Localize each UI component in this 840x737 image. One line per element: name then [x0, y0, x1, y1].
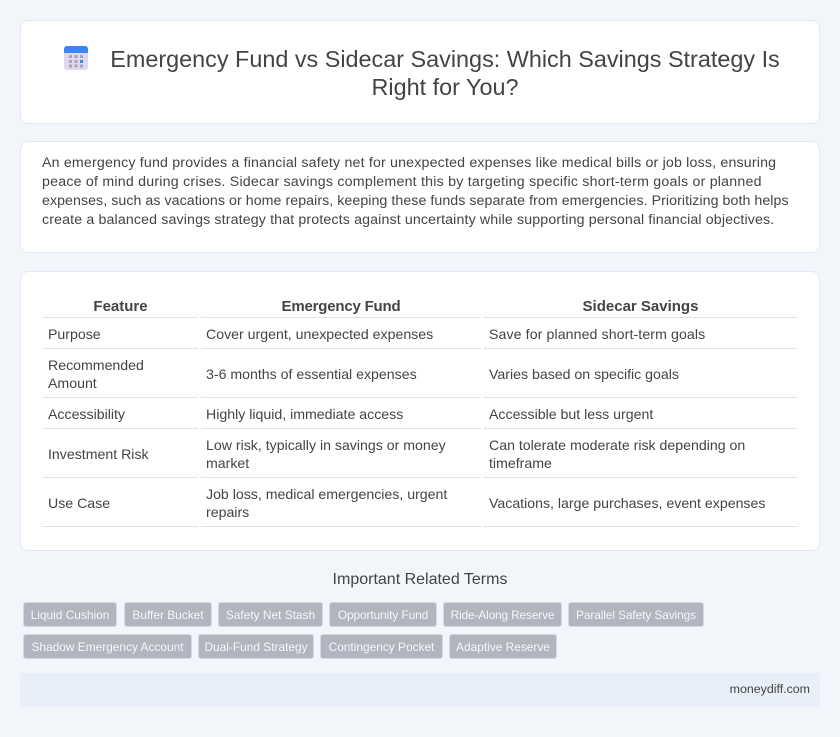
tag: Contingency Pocket [329, 640, 434, 654]
cell: Use case sidecar: Vacations, large purchases, event expenses [489, 495, 765, 511]
cell: Accessibility sidecar: Accessible but less urgent [489, 406, 653, 422]
tag [124, 602, 212, 627]
cell: Purpose sidecar: Save for planned short-term goals [489, 326, 705, 342]
tag: Dual-Fund Strategy [204, 640, 308, 654]
row: Recommended Amount: Amount [48, 375, 97, 391]
cell: Use case emergency: Job loss, medical emergencies, urgent [206, 486, 447, 502]
cell: Use case emergency: repairs [206, 504, 249, 520]
panel: header [20, 20, 820, 124]
panel: comparison table [20, 271, 820, 551]
tag [198, 634, 314, 659]
cell: Accessibility emergency: Highly liquid, immediate access [206, 406, 403, 422]
tag [23, 634, 192, 659]
cell: Risk sidecar [489, 437, 745, 471]
cell: Amount emergency: 3-6 months of essential expenses [206, 366, 417, 382]
tag [443, 602, 562, 627]
tag [218, 602, 323, 627]
title [110, 46, 780, 100]
cell: Risk emergency [206, 437, 446, 471]
tag [320, 634, 443, 659]
row: Investment Risk: Investment Risk [48, 446, 149, 462]
footer bar [20, 673, 820, 707]
heading: related terms: Important Related Terms [333, 571, 507, 588]
cell: Risk emergency: market [206, 455, 249, 471]
title: Right for You? [372, 74, 518, 100]
text block: summary: peace of mind during crises. Sidecar savings complement this by targeting specific short-term goals or planned [42, 174, 762, 190]
text block: summary [42, 155, 789, 228]
text block: summary: create a balanced savings strategy that protects against uncertainty while supporting personal financial objectives. [42, 212, 774, 228]
text block: summary: An emergency fund provides a financial safety net for unexpected expenses like medical bills or job loss, ensuring [42, 155, 776, 171]
footer credit: moneydiff.com [730, 682, 810, 696]
tag [23, 602, 117, 627]
panel: summary paragraph [20, 141, 820, 253]
cell: Risk emergency: Low risk, typically in savings or money [206, 437, 446, 453]
icon: calendar [64, 46, 88, 70]
tag [449, 634, 557, 659]
tag: Shadow Emergency Account [31, 640, 184, 654]
table header: Sidecar Savings: Sidecar Savings [583, 298, 698, 315]
cell: Amount sidecar: Varies based on specific goals [489, 366, 679, 382]
text block: summary: expenses, such as vacations or home repairs, keeping these funds separate from emergencies. Prioritizing both helps [42, 193, 789, 209]
table header: Emergency Fund: Emergency Fund [282, 298, 400, 315]
cell: Purpose emergency: Cover urgent, unexpected expenses [206, 326, 433, 342]
tag group: related terms [23, 602, 704, 659]
cell: Use case emergency [206, 486, 448, 520]
tag: Ride-Along Reserve [451, 608, 554, 622]
tag: Liquid Cushion [31, 608, 109, 622]
cell: Risk sidecar: timeframe [489, 455, 552, 471]
row: Recommended Amount [48, 357, 144, 391]
tag: Opportunity Fund [338, 608, 428, 622]
tag [568, 602, 704, 627]
tag [329, 602, 437, 627]
cell: Risk sidecar: Can tolerate moderate risk depending on [489, 437, 745, 453]
row: Accessibility: Accessibility [48, 406, 125, 422]
row: Use Case: Use Case [48, 495, 110, 511]
tag: Parallel Safety Savings [576, 608, 696, 622]
tag: Safety Net Stash [226, 608, 315, 622]
comparison table [43, 298, 797, 527]
tag: Buffer Bucket [132, 608, 204, 622]
title: Emergency Fund vs Sidecar Savings: Which Savings Strategy Is [110, 46, 780, 72]
row: Purpose: Purpose [48, 326, 101, 342]
table header: Feature: Feature [93, 298, 148, 315]
row: Recommended Amount: Recommended [48, 357, 144, 373]
tag: Adaptive Reserve [456, 640, 550, 654]
